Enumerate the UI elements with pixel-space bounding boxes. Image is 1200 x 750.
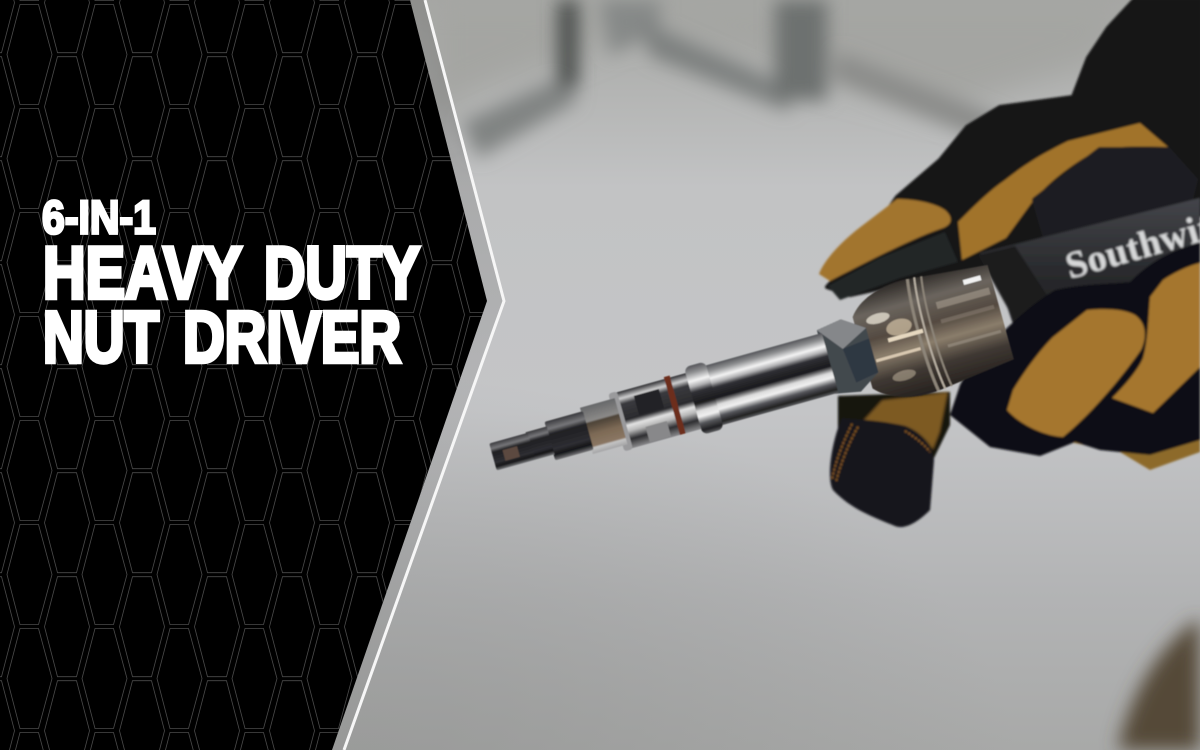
title line: nut driver: NUT [43,298,159,378]
glove: tan second finger pad [1112,263,1200,413]
black leather thumb tip with orange stitching [830,418,934,527]
glove: lower tan palm strip [1060,420,1200,470]
hex socket base [816,313,882,399]
glove: dark stitched overlay [1035,150,1195,245]
chrome socket with O-ring [607,361,724,456]
chevron panel: white outline [344,0,504,750]
glove: upper black back of hand [827,0,1200,295]
clear bit collar [847,257,1017,408]
title line: heavy duty: DUTY [264,233,420,314]
title [42,190,420,378]
glove: tan index fingertip [819,199,951,281]
title line: heavy duty: HEAVY [43,233,242,314]
title line: nut driver [43,298,401,378]
title line: heavy duty [43,233,420,314]
driver: black handle with Southwire branding [978,198,1200,330]
chevron panel: black hex-patterned panel [0,0,487,750]
chevron panel: translucent band behind the white outline [325,0,504,750]
glove: black palm and lower fingers [950,243,1200,456]
hex step [580,398,628,454]
title line: nut driver: DRIVER [183,298,401,378]
glove: dark leather under the index finger [828,232,958,300]
stepped tip [488,411,594,476]
title line: 6-in-1: 6-IN-1 [42,190,156,244]
hand wearing work glove and holding the driver [819,0,1200,527]
glove: tan strip on the back of the hand [958,123,1168,260]
large chrome cylinder [704,333,838,426]
glove: tan finger pad [1007,309,1145,437]
driver: chrome shaft and clear collar [477,257,1017,511]
blurred object in the bottom-right corner [1118,618,1200,750]
lower black thumb sleeve and tan patch [838,392,950,460]
